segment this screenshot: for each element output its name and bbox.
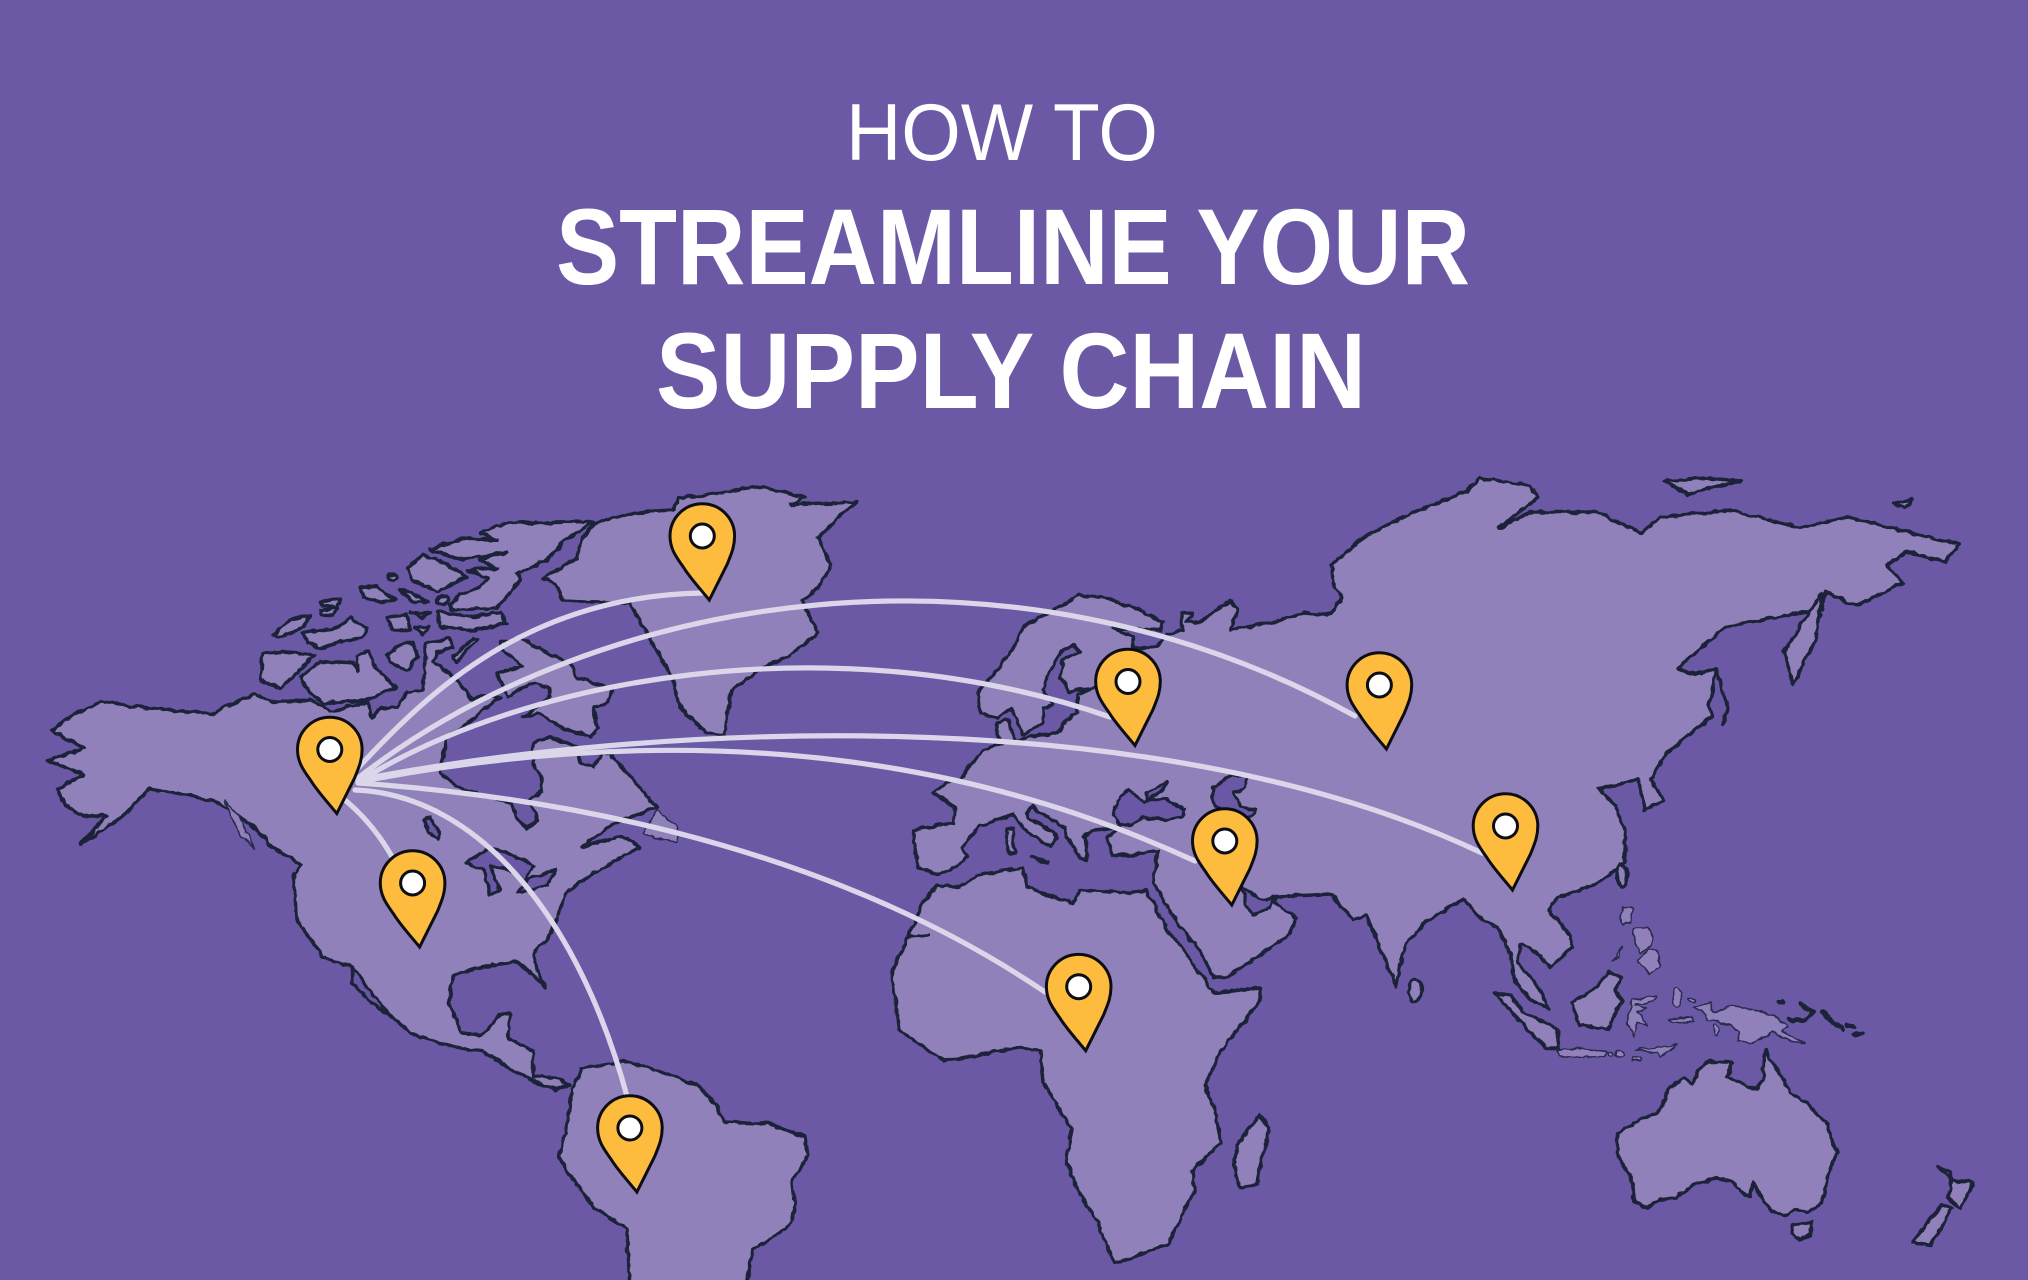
route to china (358, 736, 1482, 853)
canary coast mark (907, 935, 930, 937)
route to russia (358, 601, 1355, 778)
land: greenland (543, 486, 857, 735)
title (556, 88, 1470, 431)
title line: supply chain: SUPPLY CHAIN (656, 310, 1366, 431)
route to usa (345, 800, 395, 862)
land: sri lanka (1409, 979, 1421, 1001)
land: arctic islands (260, 522, 593, 703)
black sea (1113, 782, 1185, 825)
pin: central africa (1046, 954, 1111, 1051)
world map (48, 478, 1972, 1280)
pin: russia (1347, 653, 1412, 749)
land: vancouver islands (225, 800, 255, 849)
land: arctic russia islands (1664, 478, 1913, 508)
land: sumatra (1495, 993, 1558, 1048)
pin: usa (380, 851, 445, 947)
route to northern europe (358, 668, 1110, 782)
route to middle east (358, 750, 1195, 861)
land: mediterranean islands (1006, 828, 1048, 864)
pin: greenland (670, 504, 735, 600)
land: new guinea (1693, 1002, 1805, 1043)
title line: how to: HOW TO (846, 88, 1158, 178)
pin: northern europe (1096, 649, 1160, 746)
title line: streamline your: STREAMLINE YOUR (556, 186, 1470, 307)
location pins (298, 504, 1538, 1192)
supply routes (345, 593, 1482, 1100)
pin: canada (298, 717, 362, 814)
land: eurasia (913, 478, 1958, 1008)
land: newfoundland (643, 810, 677, 842)
land: tasmania (1792, 1222, 1812, 1240)
caspian sea (1212, 775, 1257, 830)
land: australia (1617, 1050, 1837, 1215)
persian gulf (1242, 887, 1273, 915)
land: baffin island (497, 637, 613, 737)
land: north america (48, 638, 658, 1090)
pin: middle east (1192, 809, 1257, 905)
great lakes (466, 847, 556, 895)
land: south america (559, 1061, 808, 1280)
land: solomon islands (1778, 1002, 1862, 1035)
land: new zealand (1913, 1167, 1972, 1245)
baja gulf (352, 967, 388, 1014)
pin: china (1473, 794, 1538, 890)
route to greenland (358, 593, 702, 768)
pin: south america (598, 1096, 662, 1192)
land: madagascar (1234, 1114, 1269, 1187)
route to central africa (358, 783, 1045, 992)
land: sakhalin (1784, 593, 1822, 685)
land: indonesia and philippines (1557, 907, 1718, 1061)
great bear lake (423, 817, 440, 840)
land: borneo (1572, 972, 1622, 1030)
route to south america (355, 790, 628, 1100)
land: africa (892, 868, 1260, 1263)
sea of japan sliver (1716, 669, 1728, 727)
land: taiwan (1617, 864, 1627, 886)
